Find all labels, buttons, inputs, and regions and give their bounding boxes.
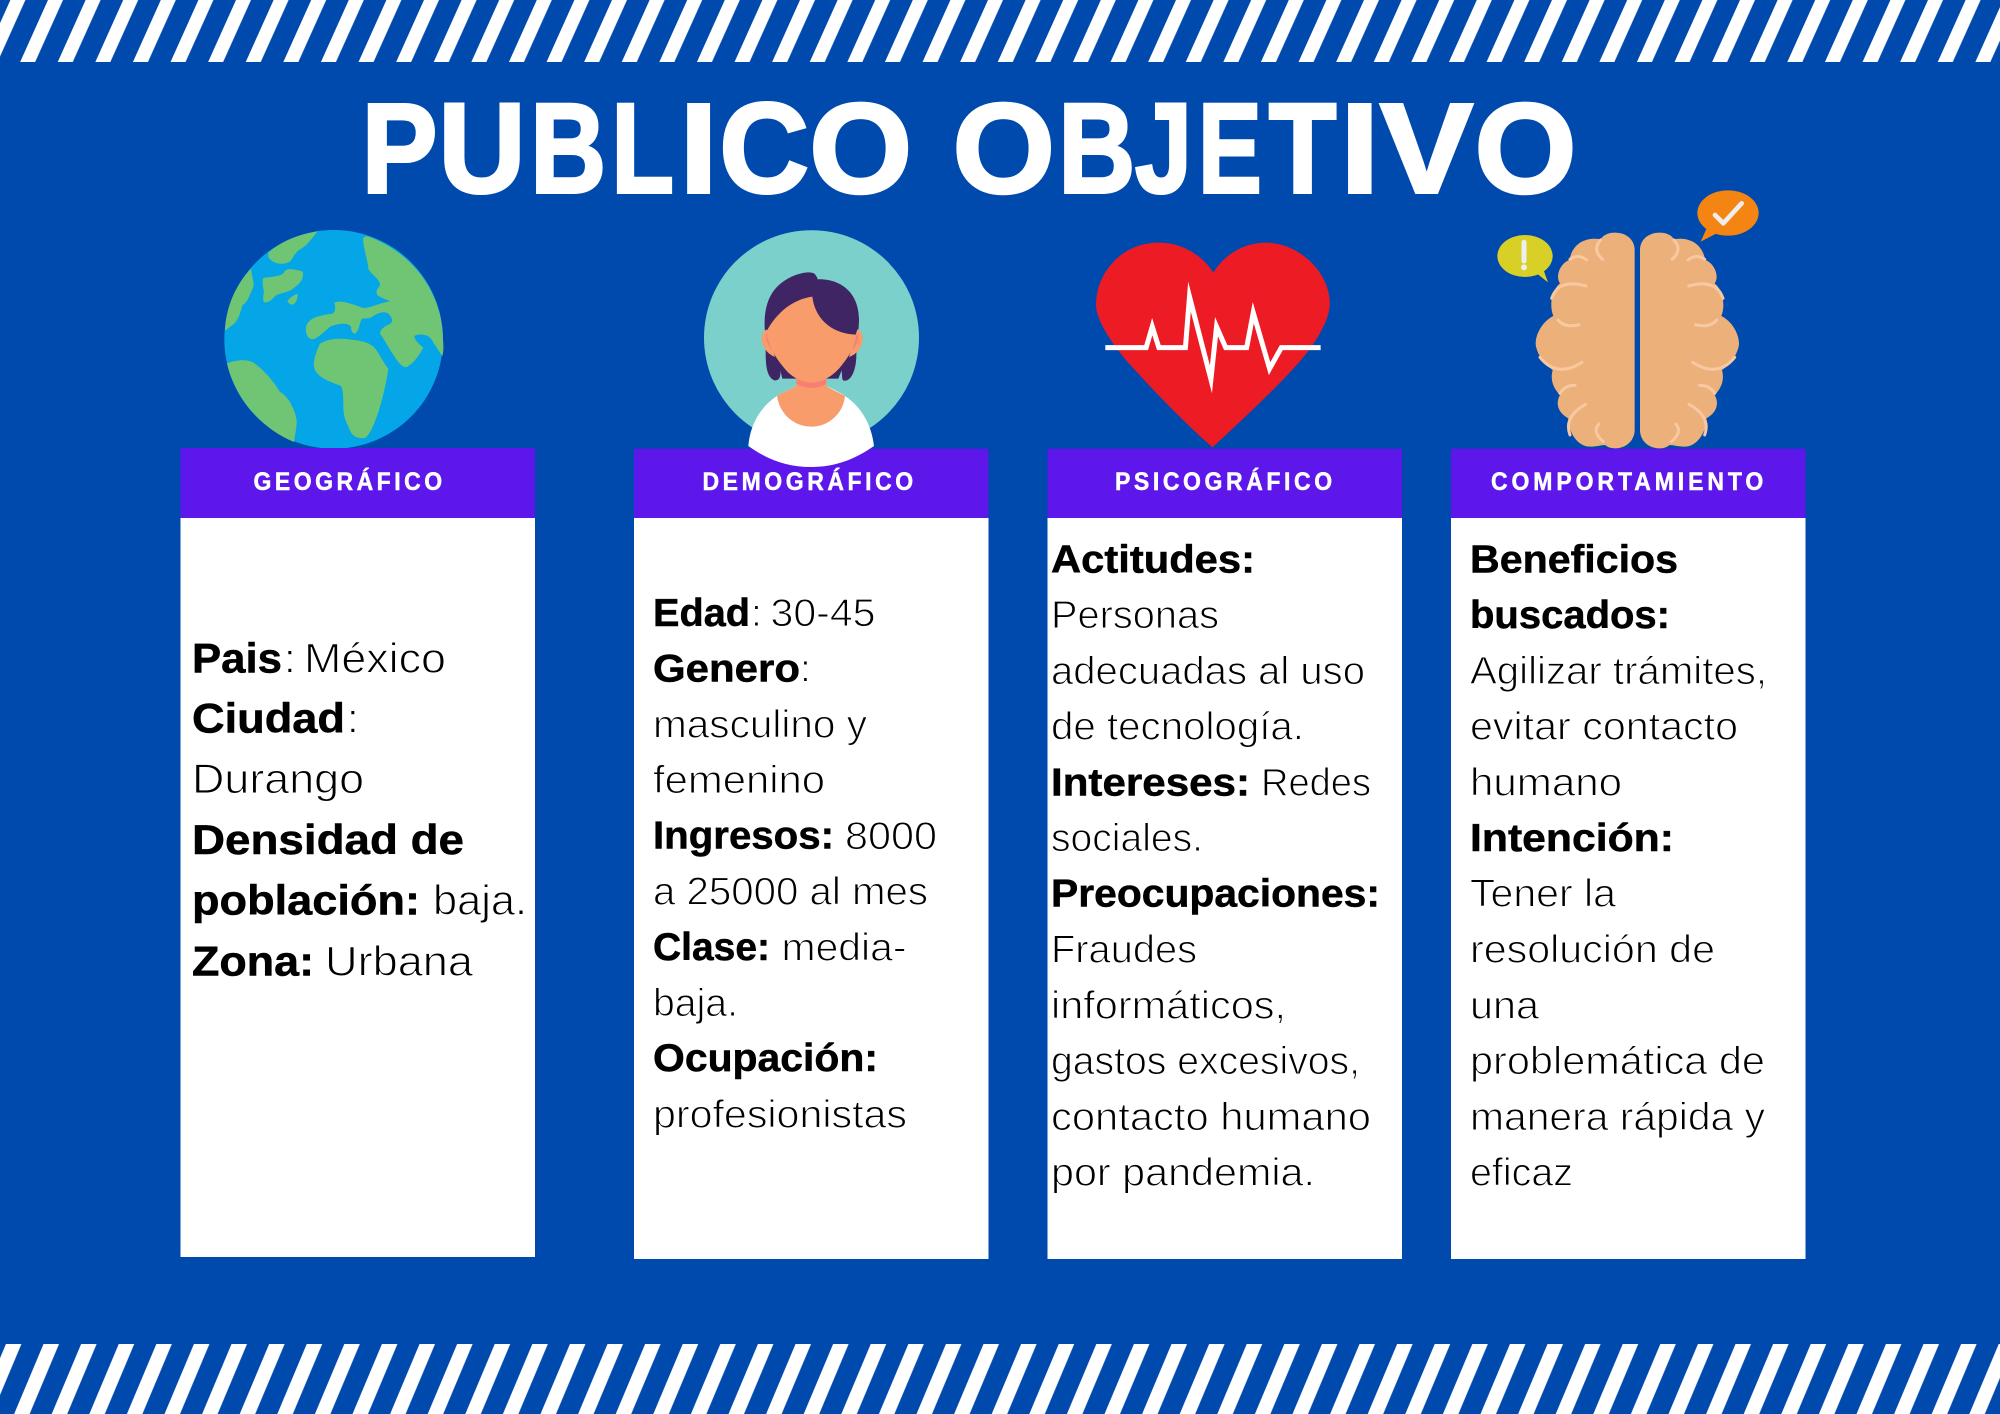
text: demografico: Clase: — [653, 926, 770, 969]
text: geografico: Urbana — [325, 938, 474, 985]
header: psicografico: PSICOGRÁFICO — [1115, 467, 1332, 496]
text: psicografico: adecuadas al uso — [1051, 650, 1365, 693]
text: demografico: Ingresos: — [653, 814, 834, 858]
text: psicografico: Preocupaciones: — [1051, 873, 1380, 916]
title: E — [1198, 78, 1262, 220]
text: comportamiento: evitar contacto — [1470, 706, 1738, 749]
text: comportamiento: humano — [1470, 762, 1622, 804]
text: psicografico: gastos excesivos, — [1051, 1040, 1360, 1083]
title: L — [611, 78, 674, 220]
text: demografico: Ocupación: — [653, 1037, 878, 1080]
title: O — [952, 78, 1055, 220]
icon: person circle — [704, 230, 919, 445]
text: demografico — [653, 592, 937, 1136]
text: comportamiento: Beneficios — [1470, 538, 1678, 582]
card: geografico — [180, 518, 535, 1257]
icon: brain with speech bubbles — [1497, 190, 1759, 448]
header: comportamiento: COMPORTAMIENTO — [1491, 468, 1763, 496]
title: C — [719, 78, 809, 220]
title: U — [438, 78, 526, 220]
text: comportamiento: resolución de — [1470, 928, 1715, 972]
card: psicografico — [1048, 518, 1402, 1259]
text: psicografico: Personas — [1051, 594, 1219, 637]
header: demografico: DEMOGRÁFICO — [702, 467, 913, 496]
text: demografico: Genero — [653, 648, 800, 690]
icon: person figure — [748, 272, 874, 467]
text: demografico: : — [751, 592, 762, 635]
text: comportamiento: eficaz — [1470, 1152, 1573, 1194]
text: geografico: : — [347, 695, 359, 742]
header: geografico: GEOGRÁFICO — [254, 467, 442, 496]
text: psicografico: sociales. — [1051, 817, 1203, 860]
text: demografico: femenino — [653, 759, 825, 802]
text: comportamiento: Tener la — [1470, 873, 1616, 916]
text: psicografico: Fraudes — [1051, 928, 1197, 972]
title: P — [362, 78, 438, 220]
text: demografico: : — [800, 648, 811, 690]
text: geografico: población: — [192, 877, 420, 924]
text: geografico: Pais — [192, 635, 282, 682]
card: demografico — [634, 518, 988, 1259]
text: comportamiento: Agilizar trámites, — [1470, 650, 1767, 693]
title: I — [1340, 78, 1379, 220]
card: comportamiento — [1451, 518, 1806, 1259]
header: psicografico — [1048, 449, 1402, 518]
text: demografico: Edad — [653, 592, 750, 635]
icon: heart with pulse — [1096, 243, 1330, 447]
header: comportamiento — [1451, 449, 1806, 518]
text: comportamiento: problemática de — [1470, 1040, 1765, 1083]
text: geografico: Durango — [192, 755, 364, 802]
text: geografico: Ciudad — [192, 695, 345, 742]
text: psicografico: contacto humano — [1051, 1096, 1371, 1139]
text: psicografico: Intereses: — [1051, 761, 1250, 804]
title: O — [809, 78, 912, 220]
text: psicografico: Redes — [1261, 762, 1371, 804]
title: J — [1135, 78, 1192, 220]
text: demografico: media- — [782, 926, 906, 969]
title: B — [1058, 78, 1135, 220]
text: geografico: baja. — [433, 877, 527, 924]
text: psicografico — [1051, 538, 1380, 1194]
text: comportamiento: manera rápida y — [1470, 1096, 1766, 1139]
text: geografico — [192, 635, 527, 985]
title: T — [1269, 78, 1336, 220]
panel: geografico — [180, 448, 535, 1257]
text: comportamiento: una — [1470, 984, 1539, 1027]
icon: globe — [224, 230, 443, 449]
text: geografico: : — [284, 635, 296, 682]
text: comportamiento: Intención: — [1470, 817, 1674, 860]
text: geografico: Zona: — [192, 938, 314, 985]
text: psicografico: de tecnología. — [1051, 706, 1304, 749]
text: demografico: profesionistas — [653, 1094, 907, 1136]
text: psicografico: por pandemia. — [1051, 1152, 1315, 1194]
text: demografico: 8000 — [845, 815, 937, 858]
text: demografico: baja. — [653, 982, 738, 1025]
panel: demografico — [634, 449, 988, 1259]
text: psicografico: informáticos, — [1051, 984, 1286, 1027]
text: demografico: 30-45 — [770, 592, 876, 635]
text: demografico: masculino y — [653, 703, 868, 746]
text: geografico: Densidad de — [192, 816, 464, 863]
title: V — [1380, 78, 1473, 220]
panel: psicografico — [1048, 449, 1402, 1259]
title: I — [680, 78, 718, 220]
title: O — [1474, 78, 1576, 220]
text: psicografico: Actitudes: — [1051, 538, 1255, 582]
panel: comportamiento — [1451, 449, 1806, 1259]
title: B — [530, 78, 606, 220]
text: comportamiento: buscados: — [1470, 594, 1670, 637]
text: geografico: México — [304, 635, 446, 682]
top stripe band — [0, 0, 2000, 62]
header: demografico — [634, 449, 988, 518]
header: geografico — [180, 448, 535, 518]
bottom stripe band — [0, 1344, 2000, 1414]
text: demografico: a 25000 al mes — [653, 870, 928, 914]
text: comportamiento — [1470, 538, 1767, 1194]
